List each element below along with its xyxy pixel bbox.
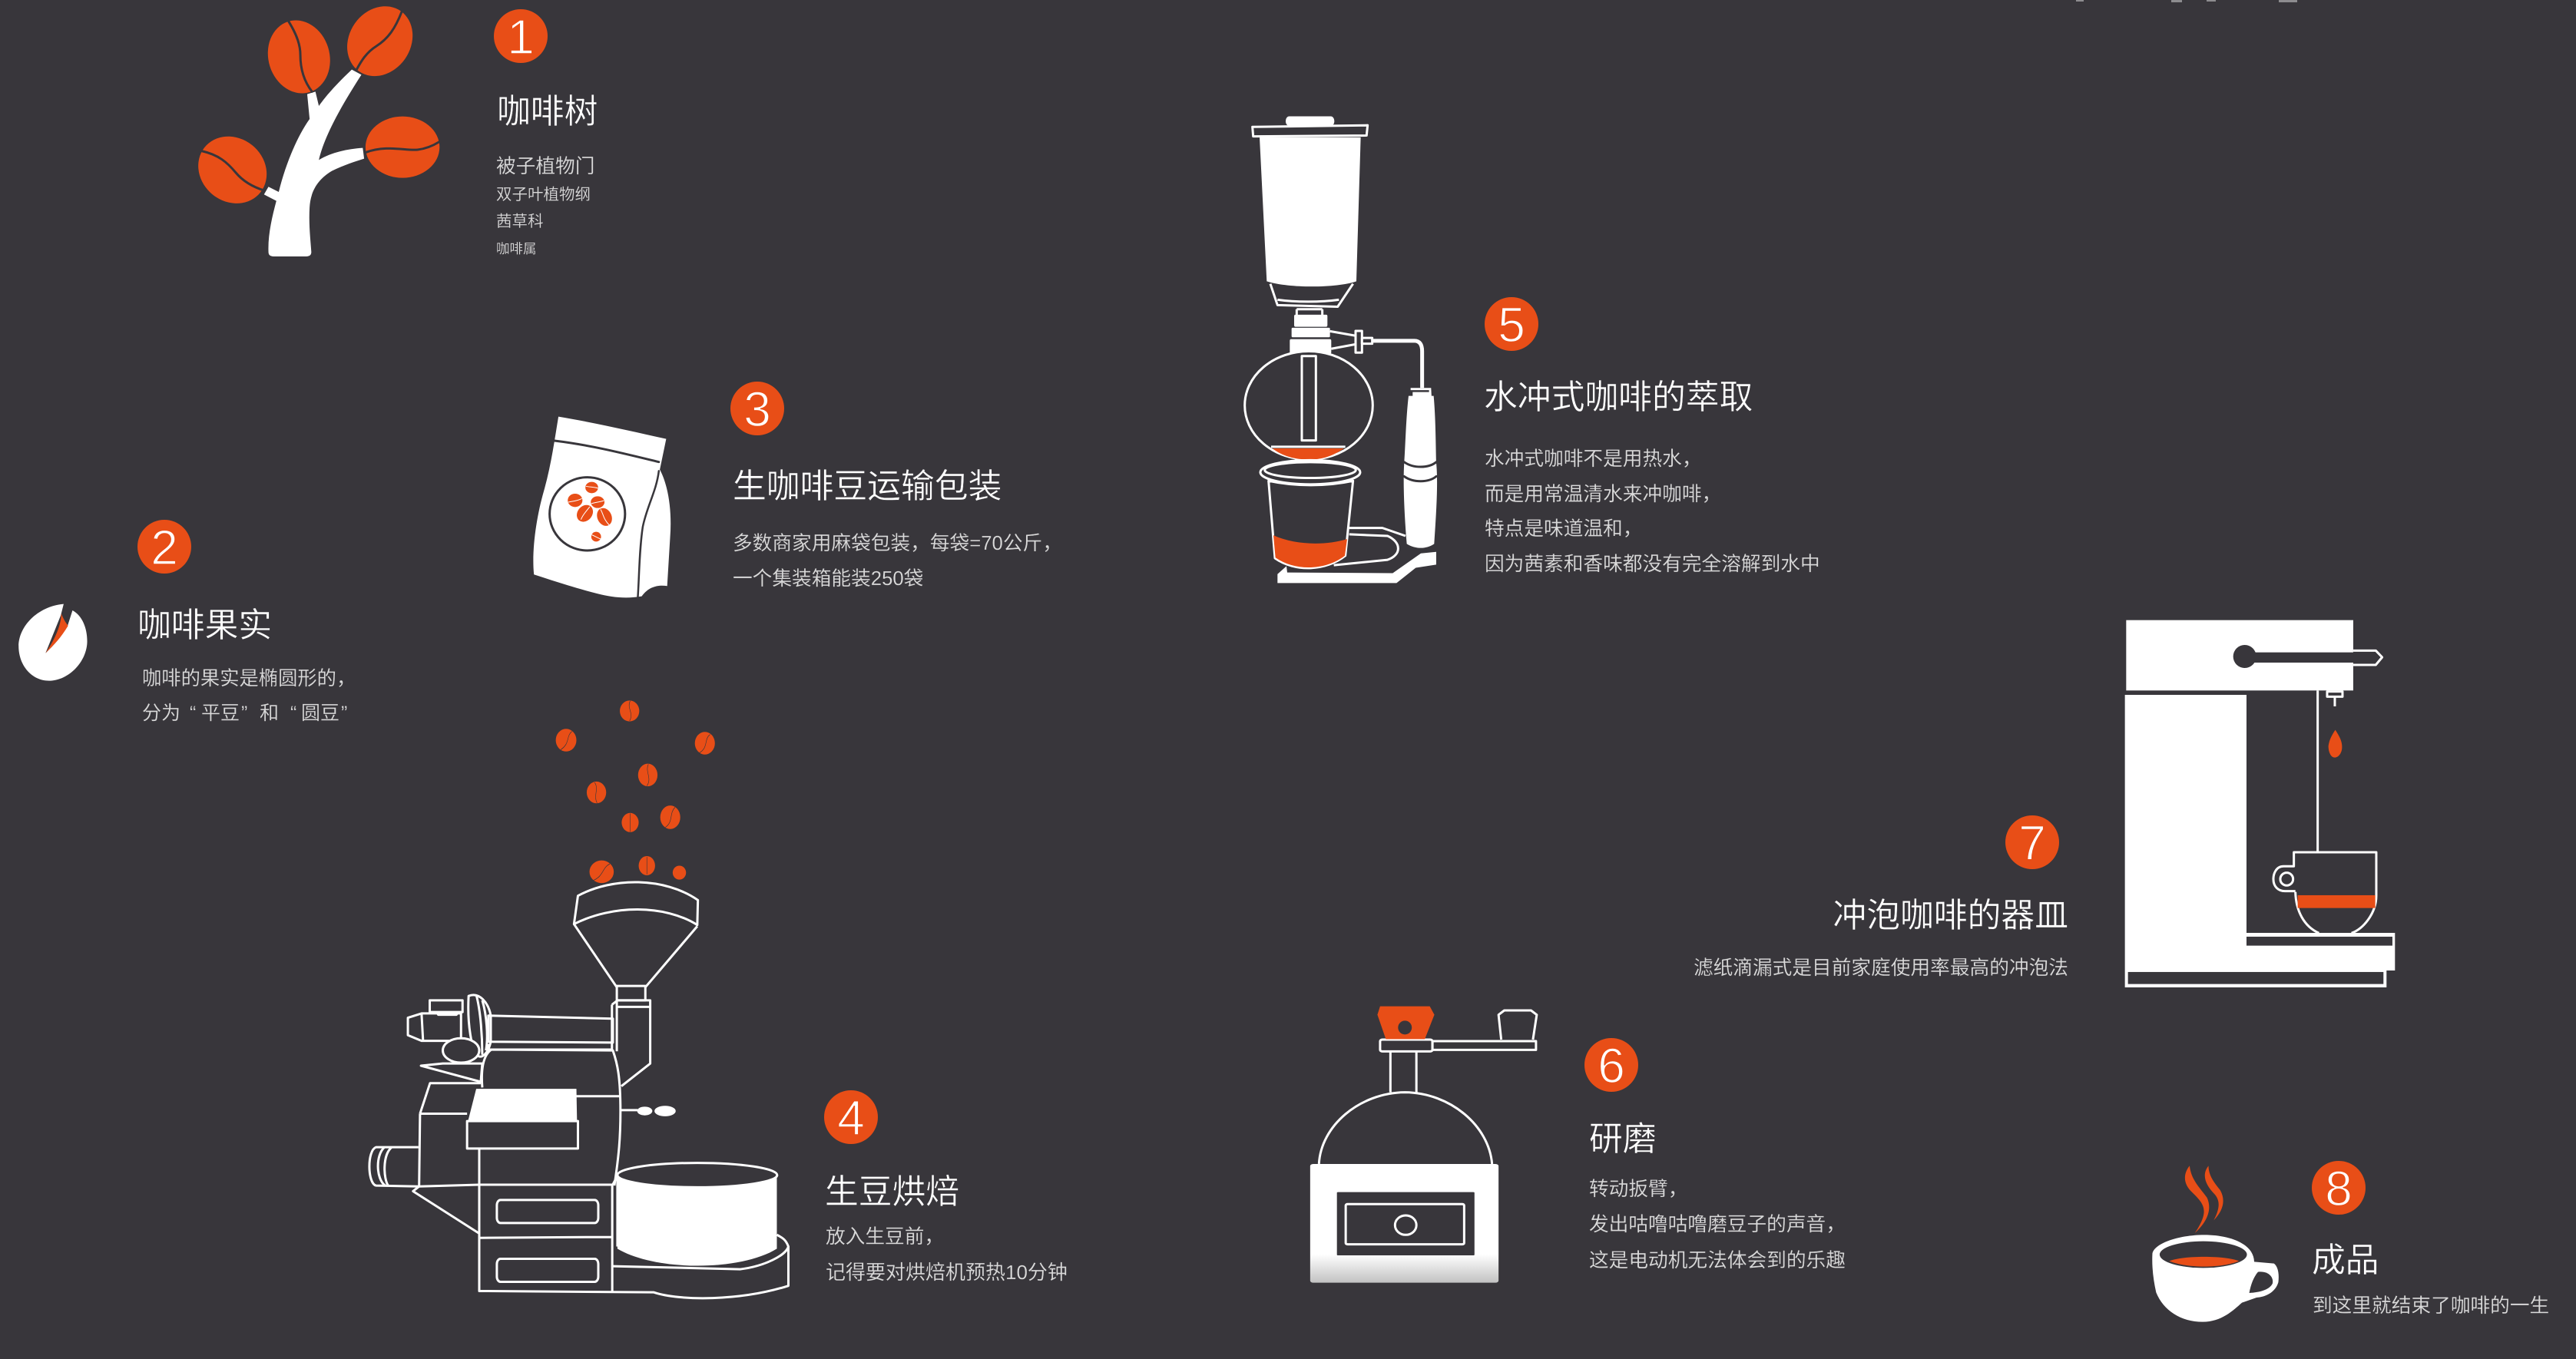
description: 发出咕噜咕噜磨豆子的声音， (1589, 1213, 1846, 1235)
description: “ (290, 703, 296, 724)
number badge 6 (1584, 1038, 1638, 1093)
description (1485, 448, 1820, 575)
icon: coffee bag (533, 417, 670, 597)
description: “ (190, 703, 196, 724)
step 5: siphon extraction (1245, 117, 1820, 583)
step 6: grinding (1310, 1007, 1846, 1283)
taxonomy text: 被子植物门 (496, 155, 594, 177)
step 8: finished coffee (2152, 1161, 2549, 1322)
taxonomy text: 茜草科 (496, 213, 544, 230)
description: 这是电动机无法体会到的乐趣 (1589, 1249, 1846, 1271)
icon: steaming coffee cup (2152, 1166, 2279, 1322)
description (142, 668, 356, 724)
icon: manual coffee grinder (1310, 1007, 1537, 1283)
description: 滤纸滴漏式是目前家庭使用率最高的冲泡法 (1694, 957, 2068, 979)
step 7: brewing vessel (1694, 620, 2395, 987)
description: 和 (260, 703, 279, 724)
icon: siphon coffee maker (1245, 117, 1437, 583)
heading: green bean roasting: 生豆烘焙 (825, 1173, 959, 1211)
heading: coffee tree: 咖啡树 (497, 93, 598, 131)
description (733, 532, 1062, 590)
number badge 5: 5 (1498, 297, 1525, 352)
number badge 2: 2 (151, 520, 178, 575)
number badge 7: 7 (2018, 815, 2046, 871)
taxonomy text (496, 155, 594, 256)
step 1: coffee tree (190, 2, 598, 256)
number badge 1 (494, 9, 548, 64)
heading: coffee fruit: 咖啡果实 (137, 607, 272, 644)
description: 因为茜素和香味都没有完全溶解到水中 (1485, 553, 1820, 575)
description: 到这里就结束了咖啡的一生 (2313, 1295, 2549, 1317)
taxonomy text: 咖啡属 (496, 241, 536, 256)
number badge 4 (824, 1090, 878, 1146)
description: 咖啡的果实是椭圆形的， (142, 668, 356, 689)
heading: bean transport packaging: 生咖啡豆运输包装 (733, 468, 1002, 505)
heading: finished product: 成品 (2312, 1242, 2379, 1279)
step 4: roasting (369, 700, 1068, 1298)
number badge 1: 1 (507, 9, 535, 64)
number badge 2 (137, 520, 191, 575)
number badge 5 (1485, 297, 1538, 352)
number badge 3 (730, 382, 784, 437)
description: 水冲式咖啡不是用热水， (1485, 448, 1702, 470)
step 3: green bean bag (533, 382, 1062, 597)
description: 转动扳臂， (1589, 1178, 1687, 1200)
icon: coffee tree with beans (190, 2, 439, 256)
icon: falling coffee beans (556, 700, 715, 883)
icon: coffee roaster machine (369, 882, 788, 1298)
description: ” (241, 703, 247, 724)
description: 多数商家用麻袋包装，每袋=70公斤， (733, 532, 1062, 554)
description: 平豆 (201, 703, 240, 724)
number badge 6: 6 (1598, 1038, 1625, 1093)
description: 一个集装箱能装250袋 (733, 567, 923, 590)
description: 圆豆 (301, 703, 339, 724)
description: 分为 (142, 703, 180, 724)
heading: brewing vessel: 冲泡咖啡的器皿 (1833, 897, 2068, 934)
description (1589, 1178, 1846, 1271)
icon: drip coffee machine (2125, 620, 2395, 987)
number badge 7 (2005, 815, 2059, 871)
taxonomy text: 双子叶植物纲 (496, 186, 591, 203)
icon: coffee fruit (18, 604, 88, 681)
description: 而是用常温清水来冲咖啡， (1485, 483, 1721, 505)
description: 特点是味道温和， (1485, 517, 1642, 540)
description: 记得要对烘焙机预热10分钟 (826, 1261, 1068, 1284)
step 2: coffee fruit (18, 520, 356, 724)
number badge 8 (2312, 1161, 2366, 1216)
description: 放入生豆前， (826, 1225, 944, 1248)
heading: grinding: 研磨 (1589, 1120, 1657, 1158)
description (826, 1225, 1068, 1284)
number badge 3: 3 (743, 382, 771, 437)
description: ” (341, 703, 347, 724)
heading: siphon extraction: 水冲式咖啡的萃取 (1484, 379, 1753, 416)
number badge 4: 4 (837, 1090, 865, 1146)
number badge 8: 8 (2325, 1161, 2353, 1216)
